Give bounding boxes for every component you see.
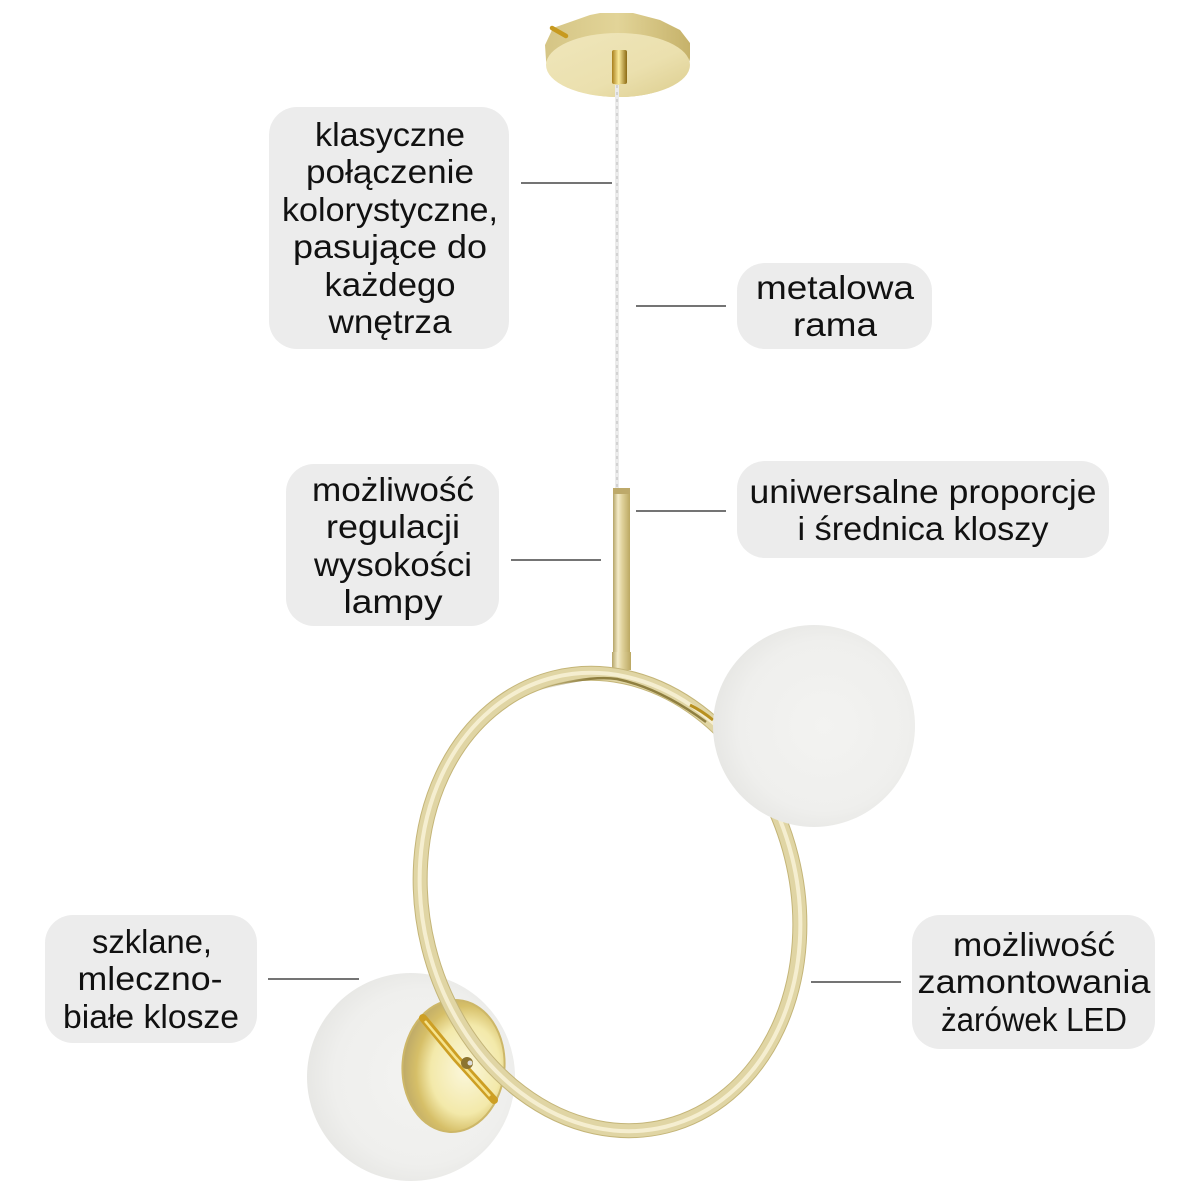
lower glass shade [307, 973, 515, 1181]
panel: metal frame callout: rama [793, 306, 878, 343]
panel: height adjustment callout: lampy [344, 583, 443, 620]
panel: colour combination callout: każdego [324, 266, 456, 303]
panel: colour combination callout: pasujące do [293, 228, 487, 265]
leader lines [268, 183, 901, 982]
panel: colour combination callout: kolorystyczne, [282, 191, 498, 228]
panel: height adjustment callout [286, 464, 499, 626]
panel: LED bulbs callout: możliwość [953, 926, 1115, 963]
panel: height adjustment callout: wysokości [313, 546, 472, 583]
panel: height adjustment callout: regulacji [326, 508, 460, 545]
panel: metal frame callout [737, 263, 932, 349]
panel: glass shades callout [45, 915, 257, 1043]
panel: colour combination callout: połączenie [306, 153, 474, 190]
panel: colour combination callout: klasyczne [315, 116, 465, 153]
panel: proportions callout [737, 461, 1109, 558]
suspension cable [615, 85, 619, 488]
panel: LED bulbs callout [912, 915, 1155, 1049]
panel: glass shades callout: białe klosze [63, 998, 239, 1035]
panel: colour combination callout: wnętrza [327, 303, 452, 340]
panel: LED bulbs callout: żarówek LED [941, 1001, 1127, 1038]
panel: glass shades callout: mleczno- [78, 960, 222, 997]
panel: proportions callout: i średnica kloszy [798, 510, 1049, 547]
panel: colour combination callout [269, 107, 509, 349]
vertical tube [612, 488, 631, 670]
panel: height adjustment callout: możliwość [312, 471, 474, 508]
gold cup [398, 997, 509, 1135]
gold ring frame [372, 632, 848, 1172]
panel: LED bulbs callout: zamontowania [918, 963, 1151, 1000]
panel: glass shades callout: szklane, [92, 923, 212, 960]
upper glass shade [713, 625, 915, 827]
ceiling canopy [545, 13, 690, 97]
panel: metal frame callout: metalowa [756, 269, 915, 306]
panel: proportions callout: uniwersalne proporcje [750, 473, 1096, 510]
